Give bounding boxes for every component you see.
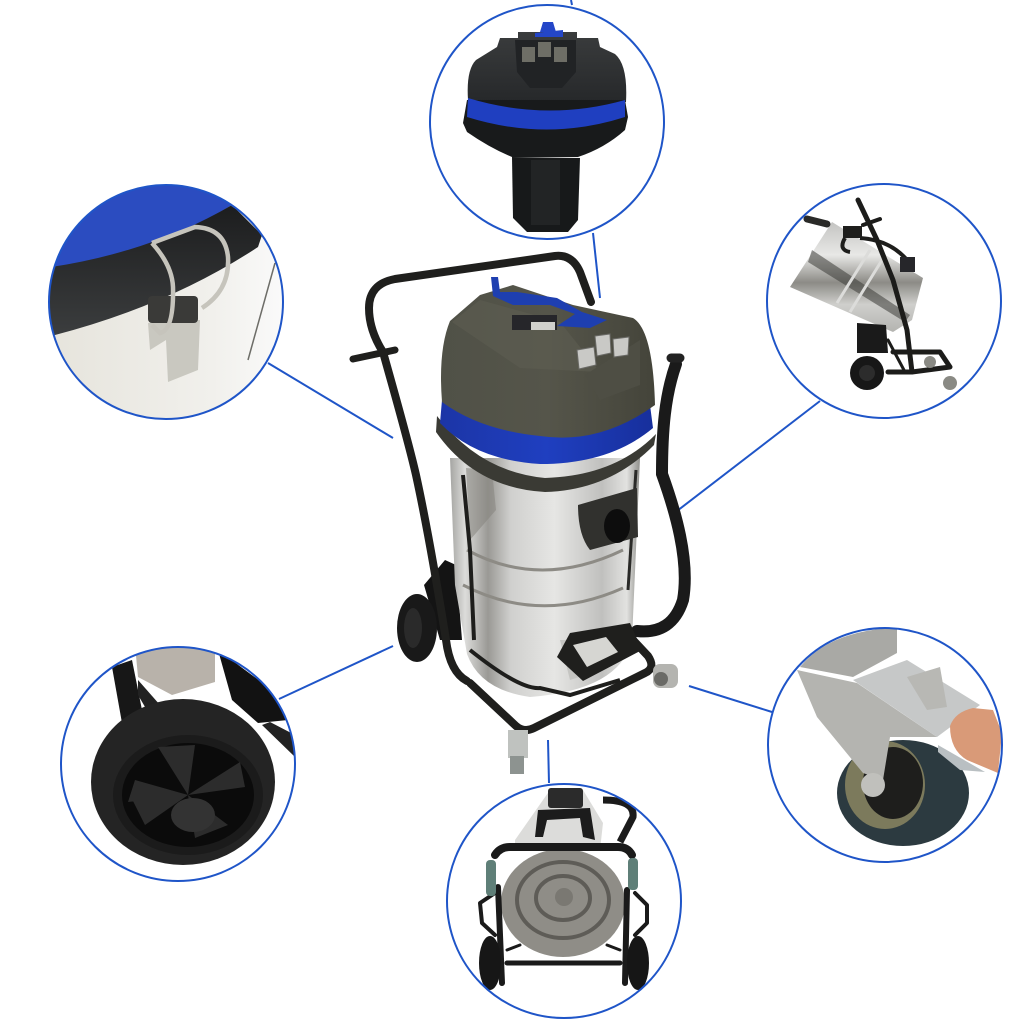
callout: tilted tank, upper right bbox=[767, 184, 1001, 418]
front handle bbox=[557, 623, 642, 681]
connector lines bbox=[268, 0, 820, 783]
callout: castor with brake, lower right bbox=[768, 628, 1002, 862]
rear wheel and cables bbox=[397, 560, 462, 662]
blue band bbox=[436, 400, 656, 492]
front castor bbox=[653, 664, 678, 688]
callout: rubber wheel, lower left bbox=[61, 645, 295, 881]
motor head bbox=[441, 285, 655, 438]
frame bbox=[353, 256, 651, 730]
main product: vacuum cleaner bbox=[353, 256, 685, 774]
side inlet bbox=[578, 488, 638, 550]
callout: tank base, bottom bbox=[447, 784, 681, 1018]
callout: clamp, upper left bbox=[45, 175, 283, 419]
bottom castor bbox=[508, 730, 528, 774]
callout: motor head, top bbox=[430, 5, 664, 239]
blue handle bbox=[491, 277, 607, 328]
switches bbox=[577, 334, 629, 369]
steel tank bbox=[450, 458, 640, 697]
flexible hose bbox=[637, 358, 685, 631]
